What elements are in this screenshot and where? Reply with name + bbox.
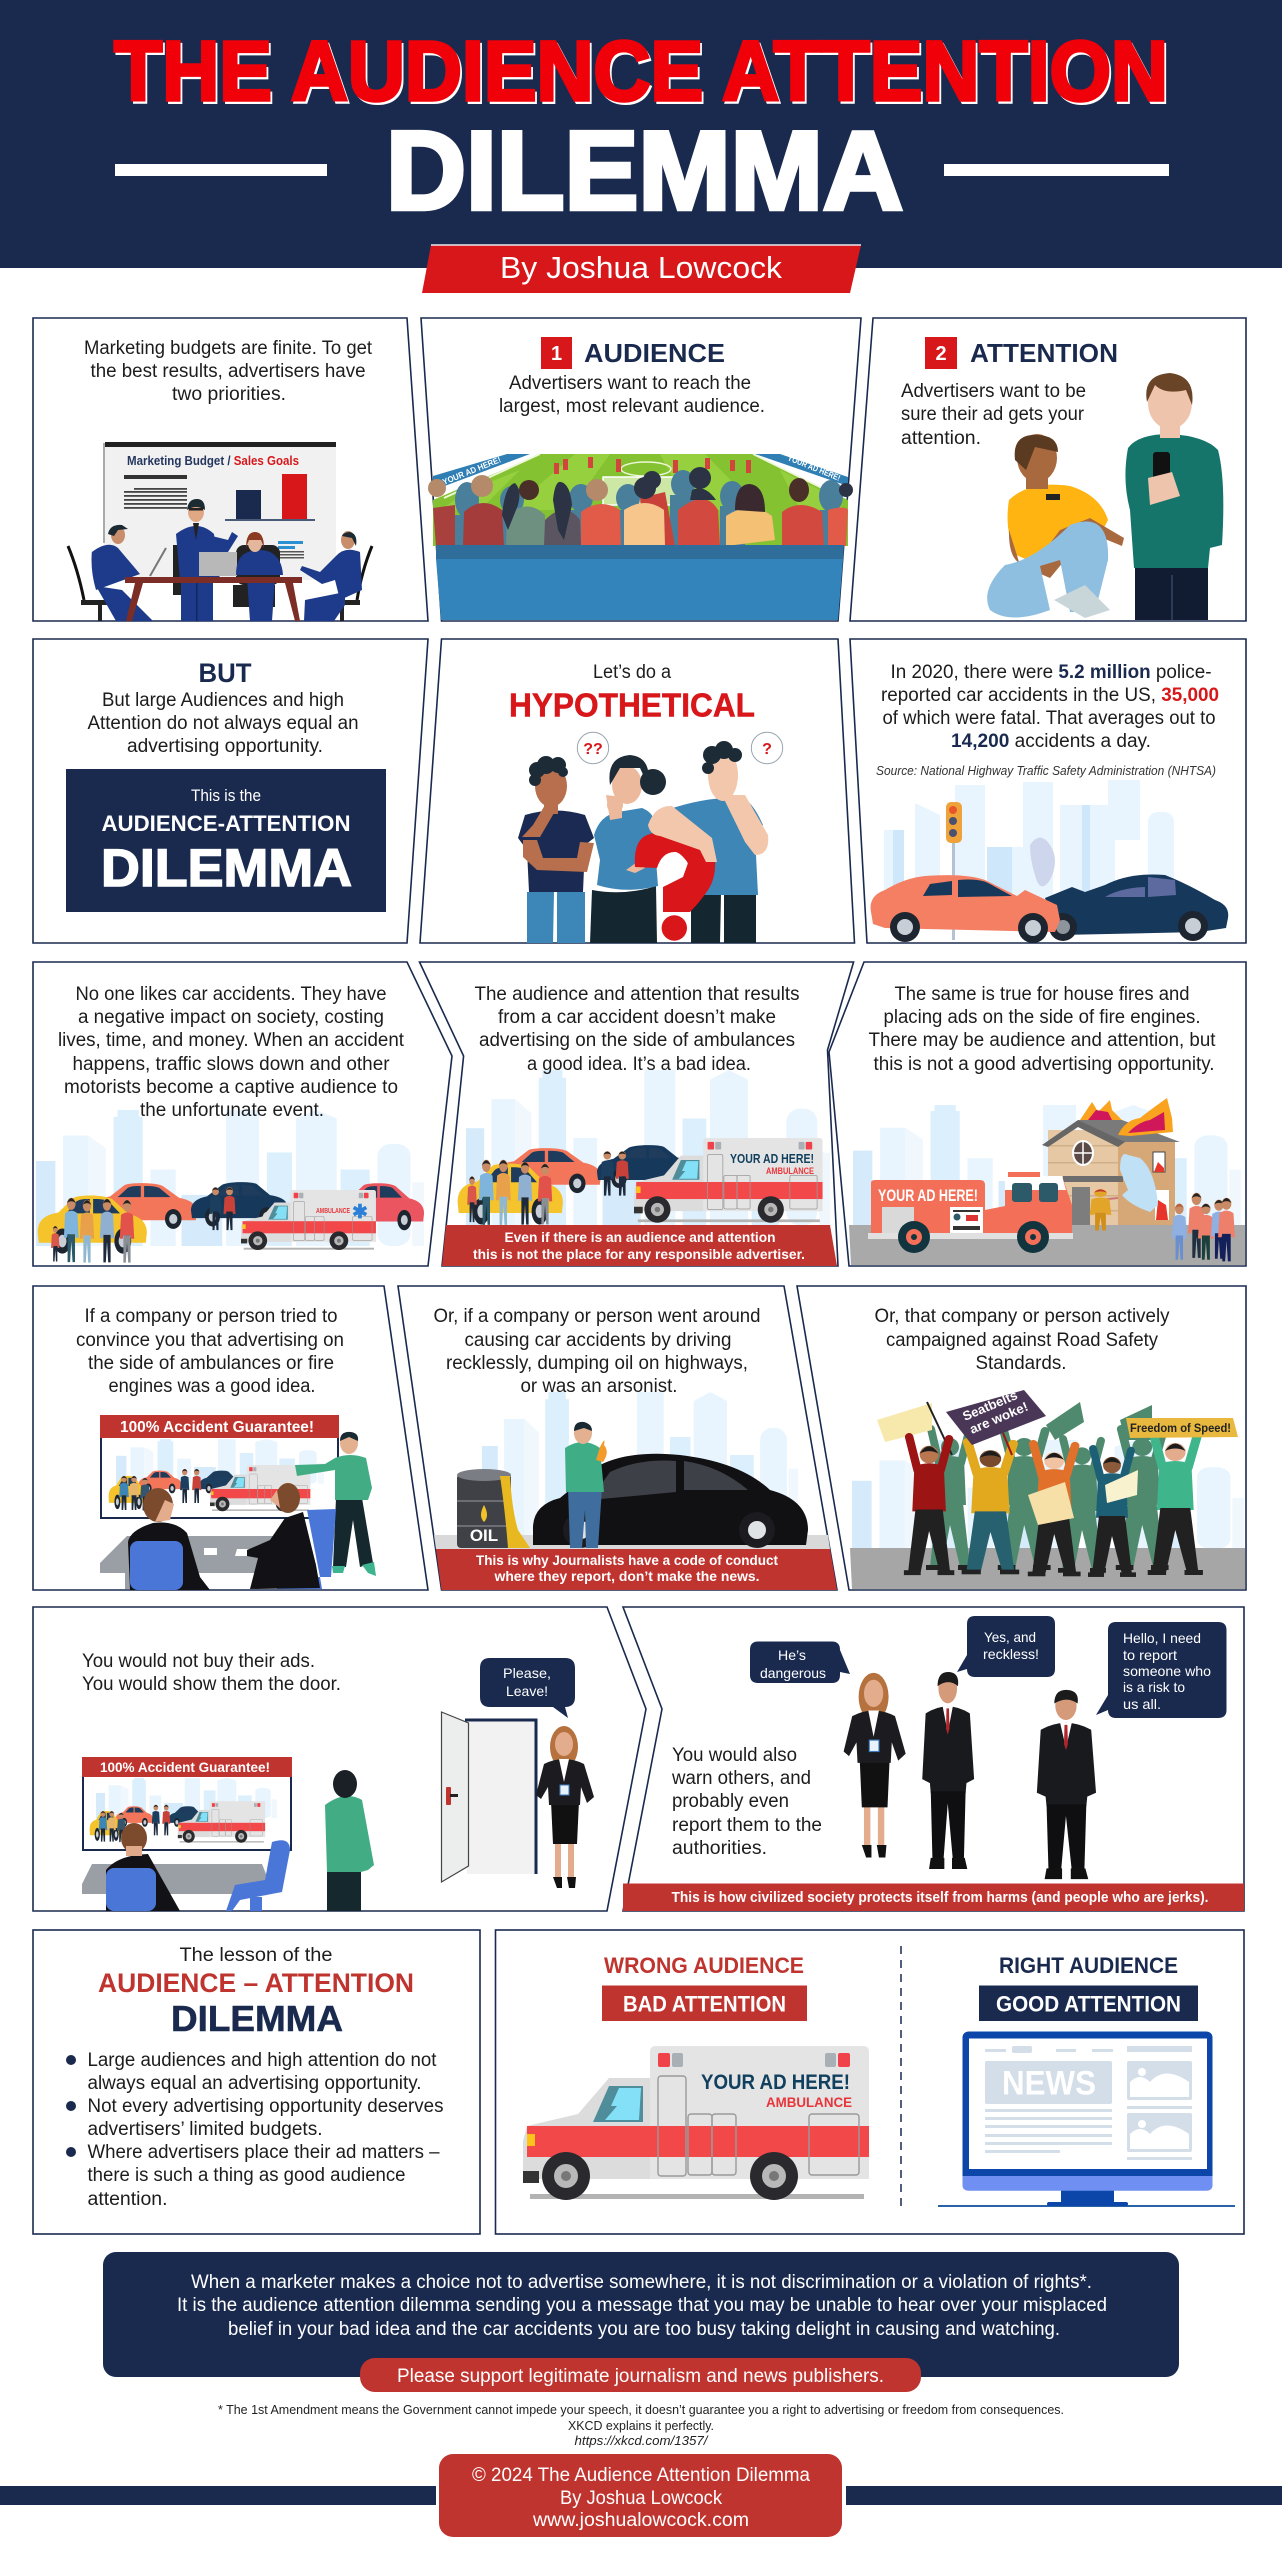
body text: campaigned against Road Safety	[886, 1330, 1158, 1351]
body text	[671, 1745, 822, 1859]
panel: marketing budgets	[33, 318, 428, 621]
caption banner: this is not the place for any responsible advertiser.	[473, 1246, 805, 1262]
callout: audience attention message: When a marketer makes a choice not to advertise somewhere, it is not discrimination or a violation of rights*.	[191, 2272, 1092, 2293]
body text	[434, 1306, 760, 1397]
speech bubble: report risk: us all.	[1123, 1696, 1161, 1712]
right audience heading	[979, 1953, 1198, 2021]
footnote text: * The 1st Amendment means the Government cannot impede your speech, it doesn’t guarantee you a right to advertising or freedom from consequences.	[218, 2403, 1064, 2417]
illustration: stadium crowd: YOUR AD HERE!	[786, 453, 842, 483]
footer bar	[0, 2450, 1282, 2541]
lesson heading: AUDIENCE – ATTENTION	[98, 1968, 414, 1998]
lesson bullets: attention.	[88, 2189, 168, 2210]
panel: show them the door	[33, 1607, 646, 1911]
illustration: pitch meeting: 100% Accident Guarantee!	[120, 1419, 314, 1436]
speech bubble: please leave: Please,	[503, 1665, 551, 1681]
illustration: ambulance with ad: AMBULANCE	[766, 2094, 852, 2110]
intro text: two priorities.	[172, 384, 286, 405]
footer credit: © 2024 The Audience Attention Dilemma	[472, 2465, 810, 2486]
title: the audience attention: THE AUDIENCE ATTENTION	[116, 26, 1170, 120]
body text: or was an arsonist.	[520, 1376, 678, 1397]
heading: 2 attention: 2	[935, 343, 947, 365]
lesson heading: DILEMMA	[171, 1998, 343, 2039]
illustration: boardroom presentation	[68, 442, 372, 621]
panel: bad idea	[420, 962, 854, 1266]
title: the audience attention: THE AUDIENCE ATTENTION	[114, 24, 1168, 118]
intro text	[84, 338, 373, 405]
body text	[58, 984, 405, 1121]
lesson bullets: there is such a thing as good audience	[88, 2165, 406, 2186]
body text: You would not buy their ads.	[82, 1651, 315, 1672]
speech bubble: please leave: Leave!	[506, 1683, 548, 1699]
panel: wrong vs right audience	[496, 1930, 1244, 2234]
body text: convince you that advertising on	[76, 1330, 344, 1351]
illustration: ambulance with ad: YOUR AD HERE!	[701, 2071, 850, 2094]
speech bubble: report risk: to report	[1123, 1647, 1177, 1663]
body text: The same is true for house fires and	[894, 984, 1190, 1005]
body text: warn others, and	[671, 1768, 811, 1789]
speech bubble: report risk: someone who	[1123, 1663, 1211, 1679]
panel: no one likes car accidents	[33, 962, 452, 1266]
illustration: two-car crash	[871, 780, 1228, 943]
body text: placing ads on the side of fire engines.	[884, 1007, 1200, 1028]
illustration: news monitor: NEWS	[1002, 2064, 1096, 2102]
lesson bullets: Not every advertising opportunity deserves	[88, 2096, 444, 2117]
illustration: news monitor	[938, 2032, 1235, 2206]
icon: door	[442, 1712, 536, 1882]
lesson bullets: always equal an advertising opportunity.	[88, 2073, 422, 2094]
illustration: three puzzled people: ??	[583, 741, 603, 758]
illustration: pitch meeting	[100, 1415, 376, 1590]
illustration: stadium crowd	[428, 453, 853, 620]
illustration: fire engine and burning house: YOUR AD HERE!	[878, 1186, 978, 1205]
source note: Source: National Highway Traffic Safety Administration (NHTSA)	[876, 763, 1216, 778]
but text	[88, 690, 358, 757]
caption banner	[436, 1549, 837, 1590]
body text: If a company or person tried to	[84, 1306, 338, 1327]
footnote text: https://xkcd.com/1357/	[574, 2434, 709, 2448]
body text: report them to the	[672, 1815, 822, 1836]
illustration: two people on phones	[987, 373, 1223, 620]
caption banner: where they report, don’t make the news.	[494, 1568, 760, 1584]
right audience heading: RIGHT AUDIENCE	[999, 1953, 1178, 1978]
illustration: accident scene with ambulance	[36, 1110, 424, 1263]
footer credit	[436, 2450, 846, 2541]
speech bubble: yes and reckless: Yes, and	[984, 1629, 1036, 1645]
footer credit: www.joshualowcock.com	[532, 2510, 749, 2531]
illustration: oil barrel and black car: OIL	[470, 1526, 498, 1545]
attention text: sure their ad gets your	[901, 404, 1085, 425]
attention text: Advertisers want to be	[901, 381, 1086, 402]
caption banner	[442, 1225, 837, 1266]
body text: this is not a good advertising opportunity.	[874, 1054, 1214, 1075]
but text: advertising opportunity.	[127, 736, 323, 757]
lesson bullets: advertisers’ limited budgets.	[88, 2119, 322, 2140]
body text: authorities.	[672, 1838, 767, 1859]
panel: attention	[850, 318, 1246, 621]
illustration: ambulance at crash	[458, 1070, 830, 1225]
body text: recklessly, dumping oil on highways,	[446, 1353, 748, 1374]
callout: audience-attention dilemma: This is the	[191, 786, 261, 805]
statistics text	[881, 662, 1219, 752]
caption banner	[623, 1884, 1244, 1911]
body text: Or, if a company or person went around	[434, 1306, 760, 1327]
illustration: fire engine and burning house	[849, 1098, 1245, 1265]
caption banner: This is why Journalists have a code of conduct	[476, 1552, 778, 1568]
body text: There may be audience and attention, but	[868, 1030, 1216, 1051]
body text: engines was a good idea.	[108, 1376, 316, 1397]
but text: Attention do not always equal an	[88, 713, 358, 734]
lead-in text: Let’s do a	[593, 662, 671, 683]
heading: 1 audience: 1	[551, 343, 562, 365]
caption banner: This is how civilized society protects itself from harms (and people who are jerks).	[672, 1889, 1208, 1906]
icon: red question mark	[635, 831, 715, 941]
attention text	[901, 381, 1086, 449]
audience text: largest, most relevant audience.	[499, 396, 765, 417]
body text	[868, 984, 1216, 1075]
panel: reckless behaviour	[398, 1286, 837, 1590]
but text: But large Audiences and high	[102, 690, 344, 711]
illustration: three puzzled people	[518, 732, 783, 943]
heading: 1 audience: AUDIENCE	[584, 338, 725, 368]
speech bubble: report risk	[1096, 1622, 1226, 1718]
illustration: ambulance at crash: AMBULANCE	[766, 1166, 814, 1176]
speech bubble: yes and reckless: reckless!	[983, 1646, 1039, 1662]
speech bubble: he's dangerous: dangerous	[760, 1665, 826, 1681]
body text	[76, 1306, 344, 1397]
callout: support journalism	[360, 2358, 921, 2392]
audience text	[499, 373, 765, 417]
callout: audience-attention dilemma	[66, 769, 386, 912]
panel: road safety campaign	[797, 1286, 1246, 1590]
footnote text	[218, 2403, 1064, 2448]
attention text: attention.	[901, 428, 981, 449]
speech bubble: please leave	[480, 1658, 575, 1718]
byline ribbon: By Joshua Lowcock	[500, 250, 783, 285]
callout: support journalism: Please support legitimate journalism and news publishers.	[397, 2366, 884, 2387]
speech bubble: he's dangerous	[750, 1642, 850, 1683]
intro text: Marketing budgets are finite. To get	[84, 338, 373, 359]
speech bubble: he's dangerous: He’s	[778, 1647, 806, 1663]
audience text: Advertisers want to reach the	[509, 373, 751, 394]
illustration: protesters: Seatbelts	[960, 1387, 1020, 1424]
right audience heading: GOOD ATTENTION	[996, 1992, 1181, 2016]
body text	[82, 1651, 341, 1695]
lesson bullets: Large audiences and high attention do not	[88, 2050, 437, 2071]
panel: ad pitch	[33, 1286, 428, 1590]
statistics text: reported car accidents in the US, 35,000	[881, 685, 1219, 706]
illustration: three puzzled people: ?	[762, 741, 772, 758]
header banner	[0, 0, 1282, 268]
wrong audience heading: WRONG AUDIENCE	[604, 1953, 804, 1978]
speech bubble: report risk: Hello, I need	[1123, 1630, 1201, 1646]
body text	[474, 984, 800, 1075]
illustration: protesters: Freedom of Speed!	[1130, 1423, 1231, 1435]
body text: The audience and attention that results	[474, 984, 800, 1005]
body text	[874, 1306, 1170, 1374]
speech bubble: report risk: is a risk to	[1123, 1679, 1185, 1695]
body text: You would show them the door.	[82, 1674, 341, 1695]
heading: but: BUT	[198, 658, 252, 688]
body text: Standards.	[976, 1353, 1066, 1374]
callout: audience attention message	[103, 2252, 1179, 2377]
body text: You would also	[672, 1745, 797, 1766]
illustration: ambulance with ad	[523, 2046, 869, 2200]
intro text: the best results, advertisers have	[90, 361, 366, 382]
callout: audience attention message: It is the audience attention dilemma sending you a message that you may be unable to hear over your misplaced	[177, 2295, 1107, 2316]
panel: accident statistics	[850, 639, 1246, 943]
heading: 2 attention: ATTENTION	[970, 338, 1118, 368]
wrong audience heading	[602, 1953, 807, 2021]
body text: from a car accident doesn’t make	[498, 1007, 776, 1028]
body text: causing car accidents by driving	[464, 1330, 732, 1351]
footer credit: By Joshua Lowcock	[560, 2488, 722, 2509]
panel: house fires	[829, 962, 1246, 1266]
body text: a good idea. It’s a bad idea.	[527, 1054, 751, 1075]
panel: warn others	[623, 1607, 1244, 1911]
illustration: meeting room	[82, 1757, 374, 1911]
lesson bullets: Where advertisers place their ad matters –	[88, 2142, 440, 2163]
illustration: meeting room: 100% Accident Guarantee!	[100, 1759, 270, 1775]
body text: No one likes car accidents. They have	[76, 984, 386, 1005]
statistics text: of which were fatal. That averages out to	[882, 708, 1216, 729]
illustration: three business people	[844, 1672, 1096, 1879]
lesson heading	[98, 1945, 414, 2039]
lesson heading: The lesson of the	[180, 1945, 332, 1966]
body text: probably even	[672, 1791, 789, 1812]
illustration: oil barrel and black car	[434, 1392, 830, 1549]
heading: hypothetical: HYPOTHETICAL	[509, 686, 755, 724]
panel: but	[33, 639, 428, 943]
title: dilemma: DILEMMA	[386, 109, 903, 233]
panel: the lesson	[33, 1930, 480, 2234]
caption banner: Even if there is an audience and attention	[504, 1229, 776, 1245]
illustration: stadium crowd: YOUR AD HERE!	[441, 454, 502, 487]
byline ribbon	[422, 245, 861, 293]
footnote text: XKCD explains it perfectly.	[568, 2419, 714, 2433]
statistics text: In 2020, there were 5.2 million police-	[890, 662, 1212, 683]
body text: the side of ambulances or fire	[88, 1353, 334, 1374]
statistics text: 14,200 accidents a day.	[951, 731, 1151, 752]
illustration: protesters	[850, 1387, 1245, 1589]
speech bubble: yes and reckless	[957, 1616, 1055, 1677]
callout: audience-attention dilemma: AUDIENCE-ATTENTION	[102, 811, 350, 836]
panel: hypothetical	[420, 639, 854, 943]
body text: Or, that company or person actively	[874, 1306, 1170, 1327]
illustration: boardroom presentation: Marketing Budget / Sales Goals	[127, 454, 299, 468]
body text: lives, time, and money. When an accident	[58, 1030, 405, 1051]
panel: audience	[421, 318, 861, 621]
body text: the unfortunate event.	[140, 1100, 324, 1121]
body text: happens, traffic slows down and other	[72, 1054, 390, 1075]
body text: motorists become a captive audience to	[64, 1077, 398, 1098]
lesson bullets	[66, 2050, 444, 2210]
illustration: ambulance at crash: YOUR AD HERE!	[730, 1151, 814, 1166]
callout: audience attention message: belief in your bad idea and the car accidents you are too busy taking delight in causing and watching.	[228, 2319, 1060, 2340]
heading: 1 audience	[541, 337, 725, 369]
body text: a negative impact on society, costing	[78, 1007, 384, 1028]
illustration: accident scene with ambulance: AMBULANCE	[316, 1208, 350, 1215]
body text: advertising on the side of ambulances	[479, 1030, 795, 1051]
illustration: woman at door	[536, 1726, 594, 1888]
wrong audience heading: BAD ATTENTION	[623, 1992, 786, 2016]
illustration: accident scene with ambulance: ✱	[352, 1202, 368, 1223]
callout: audience-attention dilemma: DILEMMA	[101, 839, 352, 898]
illustration: protesters: are woke!	[967, 1399, 1030, 1437]
